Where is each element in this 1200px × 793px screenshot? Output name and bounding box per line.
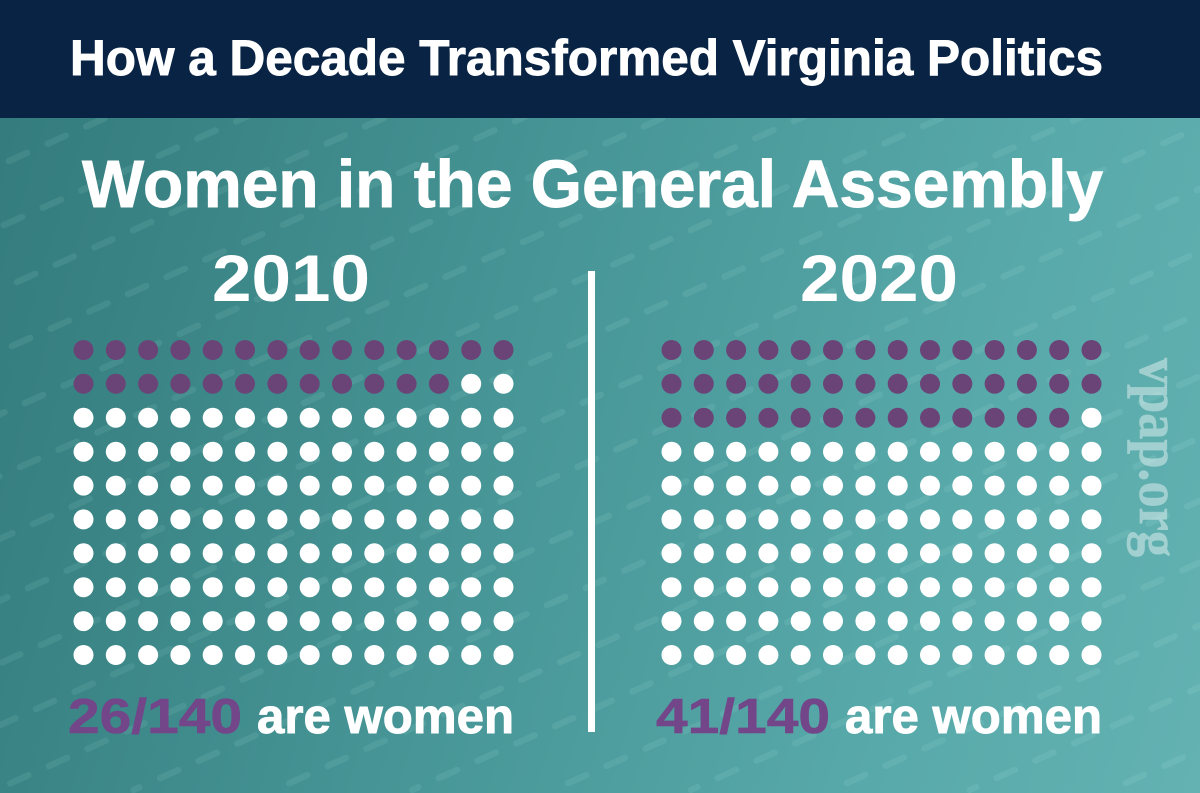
caption: 41/140 are women: are women <box>845 690 1102 744</box>
centre divider <box>588 271 595 732</box>
panel: 2020 <box>656 241 1102 744</box>
caption: 41/140 are women: 41/140 <box>656 690 830 744</box>
watermark: vpap.org: vpap.org <box>1127 358 1192 557</box>
caption: 26/140 are women <box>68 690 514 744</box>
dot grid: 2020, 41 of 140 purple <box>662 340 1102 665</box>
header banner <box>0 0 1200 118</box>
heading: 2010: 2010 <box>212 241 370 315</box>
subtitle: Women in the General Assembly <box>82 147 1103 222</box>
heading: 2020: 2020 <box>800 241 958 315</box>
dot grid: 2010, 26 of 140 purple <box>73 340 514 665</box>
panel: 2010 <box>68 241 514 744</box>
caption: 41/140 are women <box>656 690 1102 744</box>
caption: 26/140 are women: 26/140 <box>68 690 242 744</box>
header title: How a Decade Transformed Virginia Politics <box>70 30 1103 86</box>
caption: 26/140 are women: are women <box>257 690 514 744</box>
